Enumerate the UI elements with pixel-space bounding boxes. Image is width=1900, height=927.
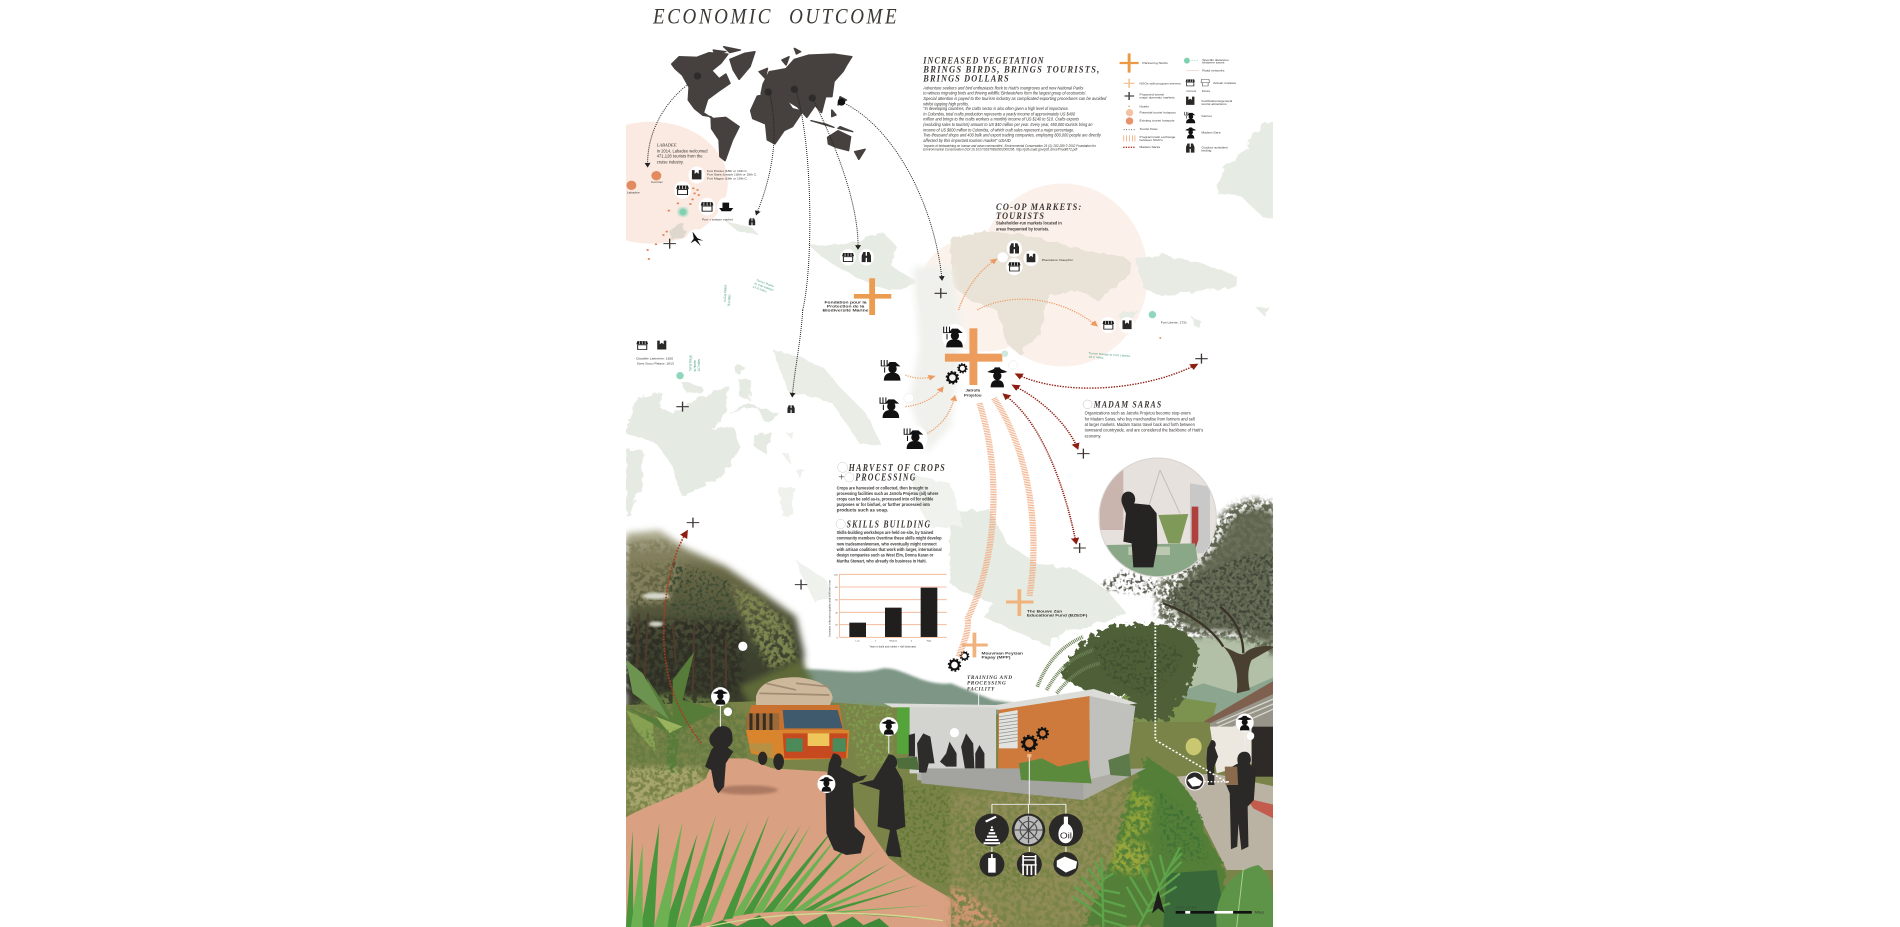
market cluster: Fondation (840, 249, 874, 266)
NGO cross: Fondation pour la Protection (854, 278, 891, 315)
co-op markets heading: TOURISTS (996, 212, 1045, 222)
mid map overlays (634, 310, 1208, 657)
text: skills body: design companies such as West Elm, Donna Karan or (837, 553, 934, 558)
callout: Labadee (656, 143, 708, 165)
Madam Sara icon (985, 361, 1018, 389)
callout: Labadee: cruise industry. (657, 160, 684, 165)
heading: increased vegetation: BRINGS BIRDS, BRINGS TOURISTS, (923, 64, 1100, 75)
icon: woven basket (1012, 814, 1045, 846)
legend: tourist attractions (1201, 102, 1227, 106)
landscape scene: backdrop (626, 499, 1277, 927)
callout: Labadee: In 2014, Labadee welcomed (657, 149, 708, 154)
label: Fondation (823, 300, 869, 312)
gears: Mirebalais (949, 652, 969, 671)
left brush with palm (626, 652, 753, 773)
NGO cross: Bouwen Zan fund: The Bouwe Zan (1027, 609, 1063, 614)
silhouette: two women exchanging goods (826, 753, 905, 857)
label: training facility: TRAINING AND (967, 675, 1013, 681)
text: skills body: with artisan coalitions that work with larger, international (836, 547, 942, 552)
legend: NGOs with program interest (1140, 82, 1181, 86)
tourist red path through forest (664, 534, 701, 743)
label: Mirebalais: Papay (MPP) (982, 655, 1011, 659)
co-op markets heading (996, 203, 1083, 232)
pale map: Haiti and eastern islands (950, 232, 1270, 355)
legend: between NGO's (1140, 138, 1163, 142)
text block: vegetation body: million and brings to the crafts workers a monthly income of US $140 to 510. Crafts exports (923, 117, 1080, 122)
teal map labels (676, 355, 701, 379)
text: harvest, skills and chart (829, 462, 947, 649)
market icons: Fort Liberte: Fort Liberte: 1731 (1161, 321, 1187, 325)
Haiti north map markers: Fort Picolet (18th or 19th C. (707, 169, 748, 173)
text: harvest body: products such as soap. (837, 508, 888, 513)
heading: Madam Saras (1083, 400, 1162, 410)
palm right (1073, 847, 1182, 927)
heading: increased vegetation: BRINGS DOLLARS (923, 74, 1010, 84)
link lines (720, 692, 1245, 853)
bar chart: Years in build and market + skill (estimate) (869, 646, 916, 649)
text block: vegetation body: 'Impacts of birdwatching on human and avian communities', Environmental Conservation 29 (3): 282-289 © 2002 Foundation for (923, 144, 1096, 148)
text block: vegetation body: Special attention is payed to the tourism industry as complicated exporting procedures can be avoided (923, 96, 1106, 102)
text: harvest body: crops can be sold as-is, processed into oil for edible (837, 497, 934, 502)
heading: increased vegetation: INCREASED VEGETATION (923, 55, 1045, 66)
market cluster: Plantation Dauphin: Plantation Dauphin (1042, 258, 1073, 262)
bar chart: Medium (889, 640, 897, 642)
text: skills body: community members Overtime these skills might develop (837, 536, 942, 541)
text block: vegetation body: Environmental Conservation DOI:10.1017/S0376892902000206. http://pdf.usaid.gov/pdf_docs/Pnadt672.pdf (923, 148, 1078, 152)
text block: vegetation body: to witness migrating birds and thriving wildlife.'Birdwatchers form the largest group of ecotourists'. (923, 91, 1087, 96)
legend: Madam Saras (1140, 145, 1161, 149)
legend: Fortifications/general (1201, 99, 1233, 103)
scale bar (1176, 906, 1264, 915)
green field patches (626, 703, 951, 887)
silhouettes inside facility (909, 733, 984, 773)
Haiti north map markers: Labadee (627, 191, 640, 195)
text: Madam Saras body: economy. (1085, 434, 1101, 438)
heading: harvest of crops: HARVEST OF CROPS (848, 463, 946, 474)
pale map: speckled Gonave column (909, 267, 963, 453)
legend: Hotels (1140, 105, 1149, 108)
product icons (975, 814, 1083, 877)
map labels teal: 76.6 miles (727, 294, 732, 307)
bar chart: 60 (835, 600, 838, 602)
NGO cross: Bouwen Zan fund: Educational Fund (BZEDF) (1027, 613, 1088, 618)
heading: Madam Saras: MADAM SARAS (1093, 400, 1162, 410)
heading: harvest of crops (838, 462, 946, 484)
legend: Artisan markets (1213, 81, 1237, 85)
processing gears (947, 364, 967, 384)
text: Madam Saras body (1085, 411, 1204, 438)
Haiti north map markers (626, 167, 757, 260)
numbered markers and saras icons (711, 642, 1254, 793)
text block: vegetation body: income of US $800 million to Colombia, of which craft sales represent a major percentage. (923, 128, 1074, 133)
label: Jatrofa Projetou: Projetou (964, 393, 982, 397)
label: Fondation: Biodiversité Marine (823, 308, 869, 312)
legend: birding (1201, 149, 1212, 152)
teal map labels: 13.7 miles (697, 359, 701, 371)
legend: Tourist flows (1140, 127, 1158, 131)
Haiti north map markers: Cormier (651, 180, 663, 184)
legend: major domestic markets (1140, 96, 1175, 100)
legend: Future (1202, 89, 1211, 93)
heading: harvest of crops: + (838, 473, 845, 484)
icon: oil bottle: Oil (1060, 831, 1072, 840)
lower grass mottling (950, 783, 1137, 927)
NGO cross: Mirebalais (962, 633, 988, 657)
legend: between towns (1202, 61, 1225, 65)
legend: Road networks (1202, 69, 1225, 72)
text: Madam Saras body: at larger markets. Madam Saras travel back and forth between (1085, 422, 1195, 427)
label: Jatrofa Projetou (964, 388, 982, 397)
legend: Outdoor activities/ (1201, 146, 1228, 149)
label: Fondation: Protection de la (827, 304, 865, 308)
tourist zone circles (574, 122, 1148, 367)
white dashed path to inset (1155, 617, 1229, 783)
label: training facility (967, 675, 1013, 692)
Madam Sara routes (1006, 365, 1196, 542)
bar chart: 0 (836, 637, 838, 639)
bar chart: Low (856, 640, 860, 642)
co-op markets heading: Stakeholder-run markets located in (996, 221, 1062, 226)
bar chart: Increase in/function quality and skill over time (829, 579, 832, 637)
hatched programmatic exchange paths (959, 398, 1033, 657)
label: Fondation: Fondation pour la (824, 300, 867, 304)
bar chart: 80 (835, 587, 838, 589)
silhouette: man with bag (1206, 740, 1256, 850)
market icons: Citadelle: Sans Souci Palace: 1813 (637, 362, 674, 365)
map labels teal: Turner Route (755, 278, 775, 288)
legend: Specific distances (1202, 58, 1229, 62)
heading: skills building (836, 519, 931, 530)
co-op markets heading: areas frequented by tourists. (996, 227, 1050, 232)
legend: Partnering NGOs (1142, 61, 1168, 65)
orange arrows to market cluster (959, 260, 1096, 325)
teal map labels: to Hinche (693, 360, 697, 371)
icon: chair (1017, 852, 1042, 877)
callout: Labadee: LABADEE (656, 143, 677, 148)
market icons: Fort Liberte (1088, 311, 1187, 360)
bar chart: 4 (911, 640, 913, 642)
label: training facility: PROCESSING (967, 680, 1006, 686)
text: harvest body (837, 485, 939, 513)
callout: Labadee: 471,128 tourists from the (657, 154, 703, 159)
dirt road (626, 758, 951, 927)
market cluster: Plantation Dauphin (997, 240, 1073, 275)
legend: Proposed towns/ (1140, 93, 1164, 96)
heading: skills building: SKILLS BUILDING (847, 519, 931, 530)
icon: soap (1053, 852, 1078, 877)
text: skills body: new tradesmen/women, who eventually might connect (837, 541, 937, 546)
text block: vegetation body: "In developing countries, the crafts sector is also often given a high level of importance. (923, 106, 1069, 112)
Haiti north map markers: Port + artisan market (702, 218, 733, 221)
origin markers on world map (694, 72, 845, 106)
right building (1203, 680, 1275, 730)
north arrow (1152, 891, 1164, 913)
map routes and top overlay (626, 5, 1237, 325)
Haiti north map markers: Fort Magny (18th or 19th C. (707, 177, 748, 180)
label: training facility: FACILITY (967, 686, 995, 692)
market icons: Fort Liberte: 15.2 miles (1088, 355, 1104, 360)
map labels teal: to Cap Haitien (754, 282, 775, 292)
legend: Madam Sara (1201, 131, 1221, 134)
bar chart: 2 (875, 640, 877, 642)
legend: Existing tourist hotspots (1140, 119, 1175, 123)
legend: Current (1186, 89, 1196, 93)
legend (1120, 53, 1237, 156)
bar chart: High (927, 640, 932, 642)
text: harvest body: processing facilities such as Jatrofa Projetou (oil) where (837, 491, 939, 496)
tourist flight paths (648, 84, 942, 310)
market icons: Citadelle (634, 337, 674, 365)
Haiti north map markers: Fort Saint-Joseph (18th or 19th C. (707, 173, 757, 177)
bar chart (829, 574, 947, 649)
heading: harvest of crops: PROCESSING (855, 473, 917, 484)
co-op markets heading: CO-OP MARKETS: (996, 203, 1083, 213)
scale bar: 0 0.5 1 2 3 4 (1176, 906, 1197, 910)
text: harvest body: Crops are harvested or collected, then brought to (837, 485, 929, 490)
inset: oil press photo (1097, 457, 1220, 580)
icon: candle (979, 852, 1004, 877)
text: skills body: Martha Stewart, who already do business in Haiti. (837, 558, 927, 563)
teal map labels: Turner Rouge (688, 355, 693, 371)
pale map: southern sweep (910, 473, 1127, 647)
legend: Potential tourist hotspots (1140, 111, 1176, 114)
market icons: Fort Liberte: Turner Rouge to Fort Liberte (1088, 351, 1131, 358)
title: ECONOMIC OUTCOME (652, 5, 899, 29)
map labels teal: to Cap Haitien (722, 284, 728, 302)
text: skills body: Skills-building workshops are held on-site, by trained (837, 530, 934, 535)
text: harvest body: purposes or for biofuel, or further processed into (837, 502, 930, 507)
foreground palm frond (626, 815, 943, 927)
NGO cross: Jatrofa Projetou (945, 328, 1002, 385)
field base (626, 700, 1273, 927)
basket on woman's head (709, 729, 733, 749)
left forest (626, 530, 813, 720)
world map (672, 47, 865, 161)
text: skills body (836, 530, 942, 563)
bar chart: 40 (835, 612, 838, 614)
farmer icons (878, 324, 967, 451)
text: Madam Saras body: for Madam Saras, who buy merchandise from farmers and sell (1085, 417, 1195, 421)
scale bar: Miles (1255, 911, 1264, 915)
text block: vegetation body: affected by this important tourism market" USAID (923, 138, 1011, 144)
farmer to facility arrows (905, 375, 954, 433)
text block: vegetation body: In Colombia, total crafts production represents a yearly income of approximately US $400 (923, 112, 1075, 117)
landscape scene: building and figures (705, 617, 1264, 915)
dotted carry path (1204, 781, 1229, 782)
market icons: Citadelle: Citadelle Laferrière: 1820 (636, 357, 674, 360)
pale map: northern islands (668, 120, 1276, 290)
text block: vegetation body: Adventure seekers and bird enthusiasts flock to Haiti's mangroves and new National Parks (922, 86, 1084, 91)
legend: Programmatic exchange (1140, 135, 1176, 139)
NGO cross: Bouwen Zan fund (1006, 589, 1088, 618)
heading: increased vegetation (923, 55, 1100, 84)
bus (746, 677, 849, 770)
bar chart: 100 (834, 574, 838, 576)
NGO labels low (962, 633, 1023, 692)
label: Jatrofa Projetou: Jatrofa (966, 388, 981, 393)
right tree and backdrop (1037, 499, 1277, 730)
label: Mirebalais (982, 651, 1023, 659)
hedge and foreground greens (1073, 757, 1275, 927)
text block: vegetation body: Two-thousand shops and 400 bulk and export trading companies, employing 800,000 people are directly (923, 133, 1101, 138)
text: Madam Saras body: Organizations such as Jatrofa Projetou become stop-overs (1085, 411, 1191, 416)
legend: Farmer (1201, 114, 1212, 118)
gears on facility (1022, 728, 1048, 751)
label: Mirebalais: Mouvman Peyizan (982, 651, 1023, 655)
text block: vegetation body (922, 86, 1106, 152)
map labels teal (722, 278, 775, 307)
silhouette: woman carrying basket (705, 726, 733, 793)
text: Madam Saras body: townsand countryside, and are considered the backbone of Haiti's (1085, 428, 1204, 433)
training facility building (884, 689, 1146, 800)
text block: vegetation body: (excluding sales to tourists) amount to US $40 million per year. Every year, 650,000 tourists bring an (923, 122, 1093, 128)
mountains (802, 666, 1016, 714)
icon: honey dipper (975, 814, 1009, 846)
text block: vegetation body: whilst tapping high profits. (923, 102, 969, 107)
bar chart: 20 (835, 625, 838, 627)
pale map: western archipelago (626, 350, 883, 600)
bag (1225, 767, 1238, 785)
map labels teal: 13.6 miles (752, 285, 768, 293)
